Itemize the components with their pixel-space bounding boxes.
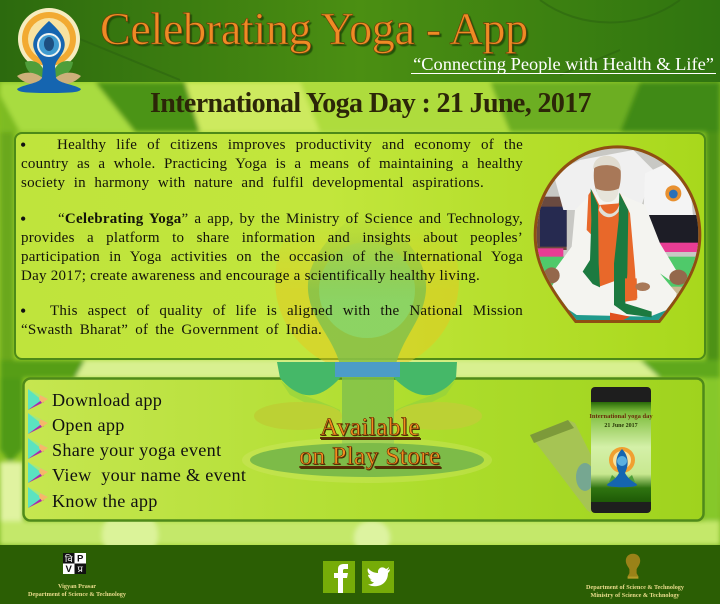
text block: paragraph 3: • [20, 301, 26, 321]
list item: open: Open app [52, 415, 125, 435]
icon: play arrow 1 [28, 389, 48, 410]
text block: paragraph 1 [20, 135, 523, 191]
list item: download: Download app [52, 390, 162, 410]
text block: paragraph 2 [20, 209, 523, 284]
caption: vigyan prasar: Vigyan Prasar [58, 583, 96, 590]
footer [0, 545, 720, 604]
caption: ministry: Department of Science & Technology [586, 584, 684, 591]
icon: play arrow 5 [28, 487, 48, 508]
icon: state emblem of india [626, 554, 640, 579]
text block: paragraph 2: provides a platform to share information and insights about peoples’ [21, 230, 523, 246]
logo: vigyan prasar: प्र [78, 565, 84, 574]
text block: paragraph 2: “Celebrating Yoga” a app, by the Ministry of Science and Technology, [58, 211, 523, 227]
icon: play arrow 4 [28, 462, 48, 483]
caption: vigyan prasar: Department of Science & Technology [28, 590, 126, 598]
logo: vigyan prasar: V [66, 565, 73, 574]
call to action: available on play store: Available [320, 412, 420, 441]
text block: paragraph 3 [20, 301, 523, 338]
logo: vigyan prasar [63, 553, 86, 574]
panel: about the app [14, 132, 706, 360]
text block: paragraph 2: Day 2017; create awareness and encourage a scientifically healthy living. [21, 268, 480, 284]
caption: ministry [586, 584, 684, 598]
caption: ministry: Ministry of Science & Technology [590, 592, 680, 598]
text block: paragraph 3: This aspect of quality of life is aligned with the National Mission [50, 303, 523, 319]
call to action: available on play store [299, 412, 442, 470]
text block: paragraph 2: participation in Yoga activities on the occasion of the International Yoga [21, 249, 523, 265]
list item: share: Share your yoga event [52, 440, 221, 460]
list item: know: Know the app [52, 491, 158, 511]
subtitle: date: International Yoga Day : 21 June, 2017 [150, 88, 591, 119]
tagline: “Connecting People with Health & Life” [413, 54, 714, 74]
tilted phone [530, 420, 594, 513]
front phone [589, 387, 653, 513]
icon: play arrow 3 [28, 438, 48, 459]
text block: paragraph 3: “Swasth Bharat” of the Government of India. [21, 322, 322, 338]
list: play store arrows [28, 389, 48, 508]
title: Celebrating Yoga - App [100, 3, 528, 54]
call to action: available on play store: on Play Store [299, 441, 441, 470]
caption: vigyan prasar [28, 583, 126, 598]
photo: man meditating in circular frame [534, 145, 702, 323]
icon: facebook [323, 561, 355, 593]
text block: paragraph 2: • [20, 209, 26, 229]
phones: app screenshot [530, 387, 653, 513]
list item: view: View your name & event [52, 465, 246, 485]
front phone: International yoga day [589, 413, 653, 420]
text block: paragraph 1: • [20, 135, 26, 155]
text block: paragraph 1: society in harmony with nature and fulfil developmental aspirations. [21, 175, 484, 191]
icon: play arrow 2 [28, 413, 48, 434]
front phone: 21 June 2017 [604, 423, 638, 429]
panel: app actions [22, 377, 705, 522]
icon: twitter [362, 561, 394, 593]
text block: paragraph 1: country as a whole. Practicing Yoga is a means of maintaining a healthy [21, 156, 523, 172]
text block: paragraph 1: Healthy life of citizens improves productivity and economy of the [57, 137, 523, 153]
logo: vigyan prasar: P [77, 554, 83, 564]
logo: International Day of Yoga [17, 8, 81, 93]
